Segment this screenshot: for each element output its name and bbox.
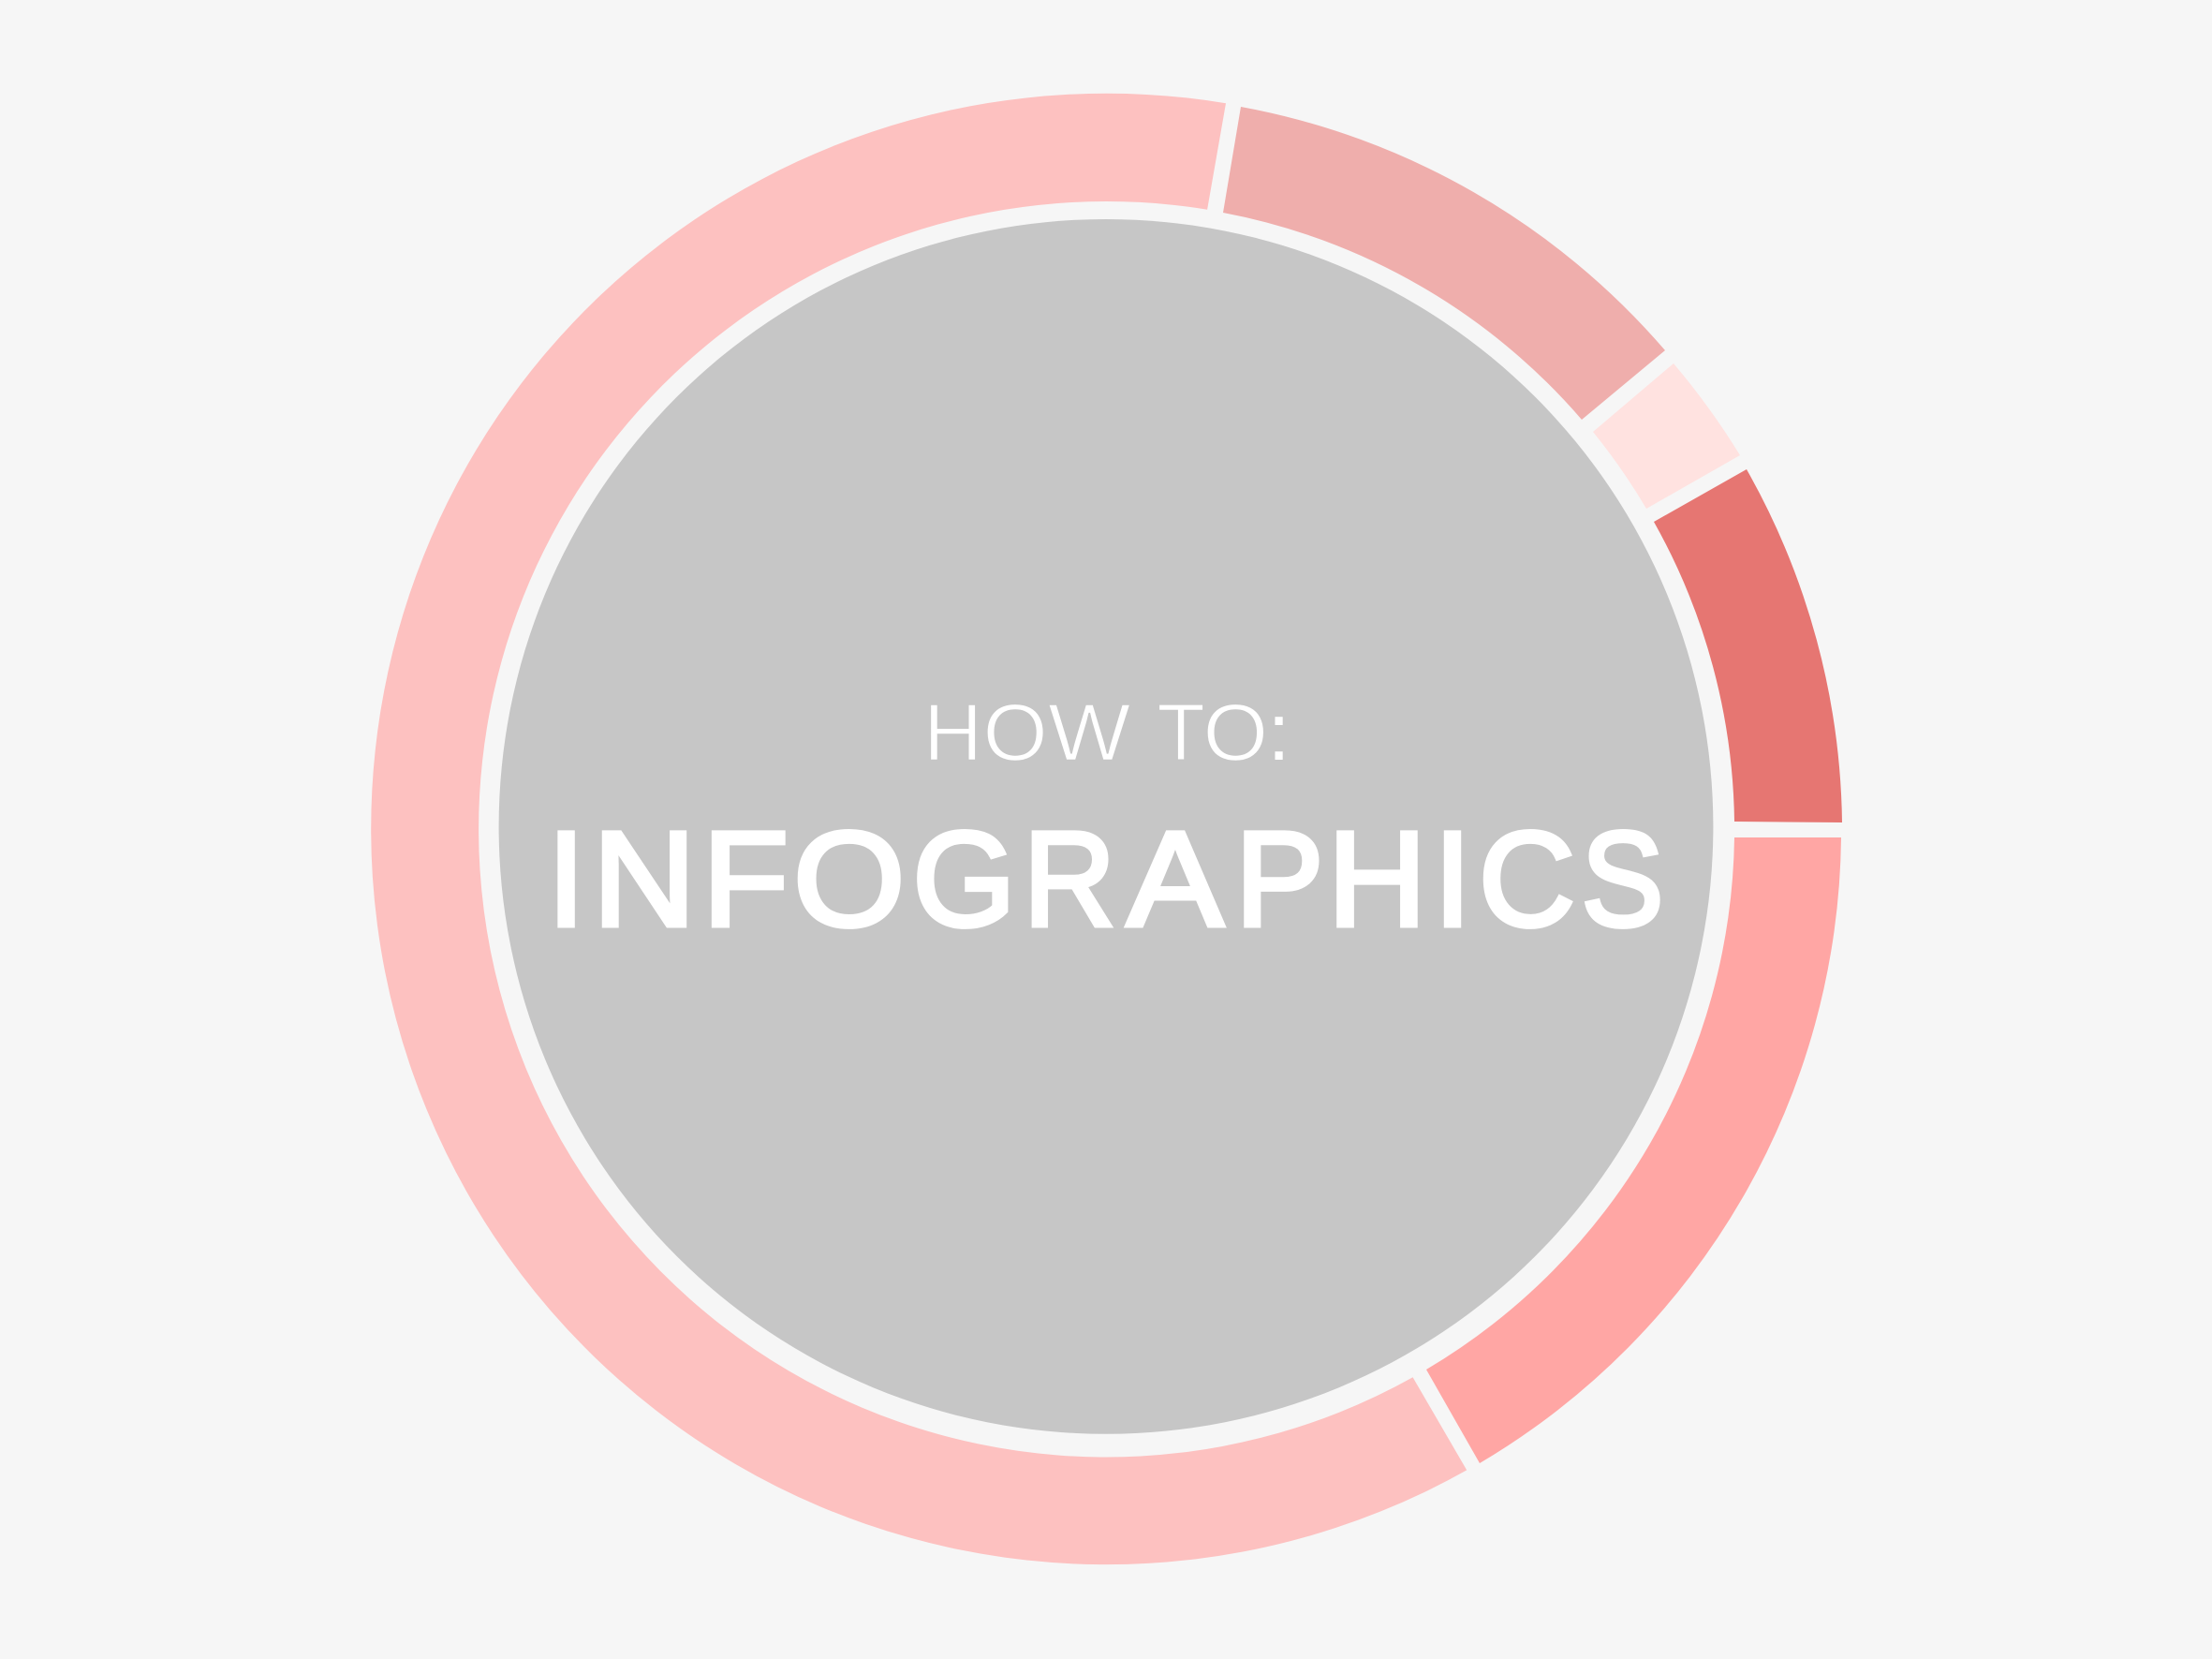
heading: INFOGRAPHICS: S xyxy=(1582,804,1663,955)
heading: INFOGRAPHICS: R xyxy=(1024,804,1115,955)
heading: INFOGRAPHICS: P xyxy=(1235,804,1324,955)
heading: INFOGRAPHICS xyxy=(548,804,1663,955)
heading: HOW TO:: W xyxy=(1048,689,1130,778)
center grey circle xyxy=(499,219,1713,1434)
heading: INFOGRAPHICS: A xyxy=(1127,804,1223,955)
heading: INFOGRAPHICS: G xyxy=(912,804,1015,955)
heading: HOW TO:: O xyxy=(983,689,1048,778)
heading: HOW TO:: T xyxy=(1158,689,1205,778)
ring segment: salmon pink xyxy=(1426,837,1841,1463)
heading: HOW TO: xyxy=(923,688,1290,778)
ring segment: deep coral xyxy=(1654,469,1842,822)
ring segment: palest pink xyxy=(1593,363,1740,509)
heading: INFOGRAPHICS: O xyxy=(793,804,905,955)
heading: HOW TO:: H xyxy=(923,689,982,778)
ring segment: muted rose xyxy=(1223,107,1665,420)
heading: HOW TO:: O xyxy=(1203,689,1268,778)
heading: INFOGRAPHICS: I xyxy=(548,804,585,955)
heading: INFOGRAPHICS: I xyxy=(1434,804,1471,955)
heading: INFOGRAPHICS: H xyxy=(1328,804,1426,955)
heading: INFOGRAPHICS: N xyxy=(593,804,696,955)
heading: INFOGRAPHICS: C xyxy=(1479,804,1575,955)
heading: INFOGRAPHICS: F xyxy=(702,804,789,955)
ring segment: large light pink xyxy=(371,94,1467,1564)
heading: HOW TO:: : xyxy=(1268,688,1290,778)
